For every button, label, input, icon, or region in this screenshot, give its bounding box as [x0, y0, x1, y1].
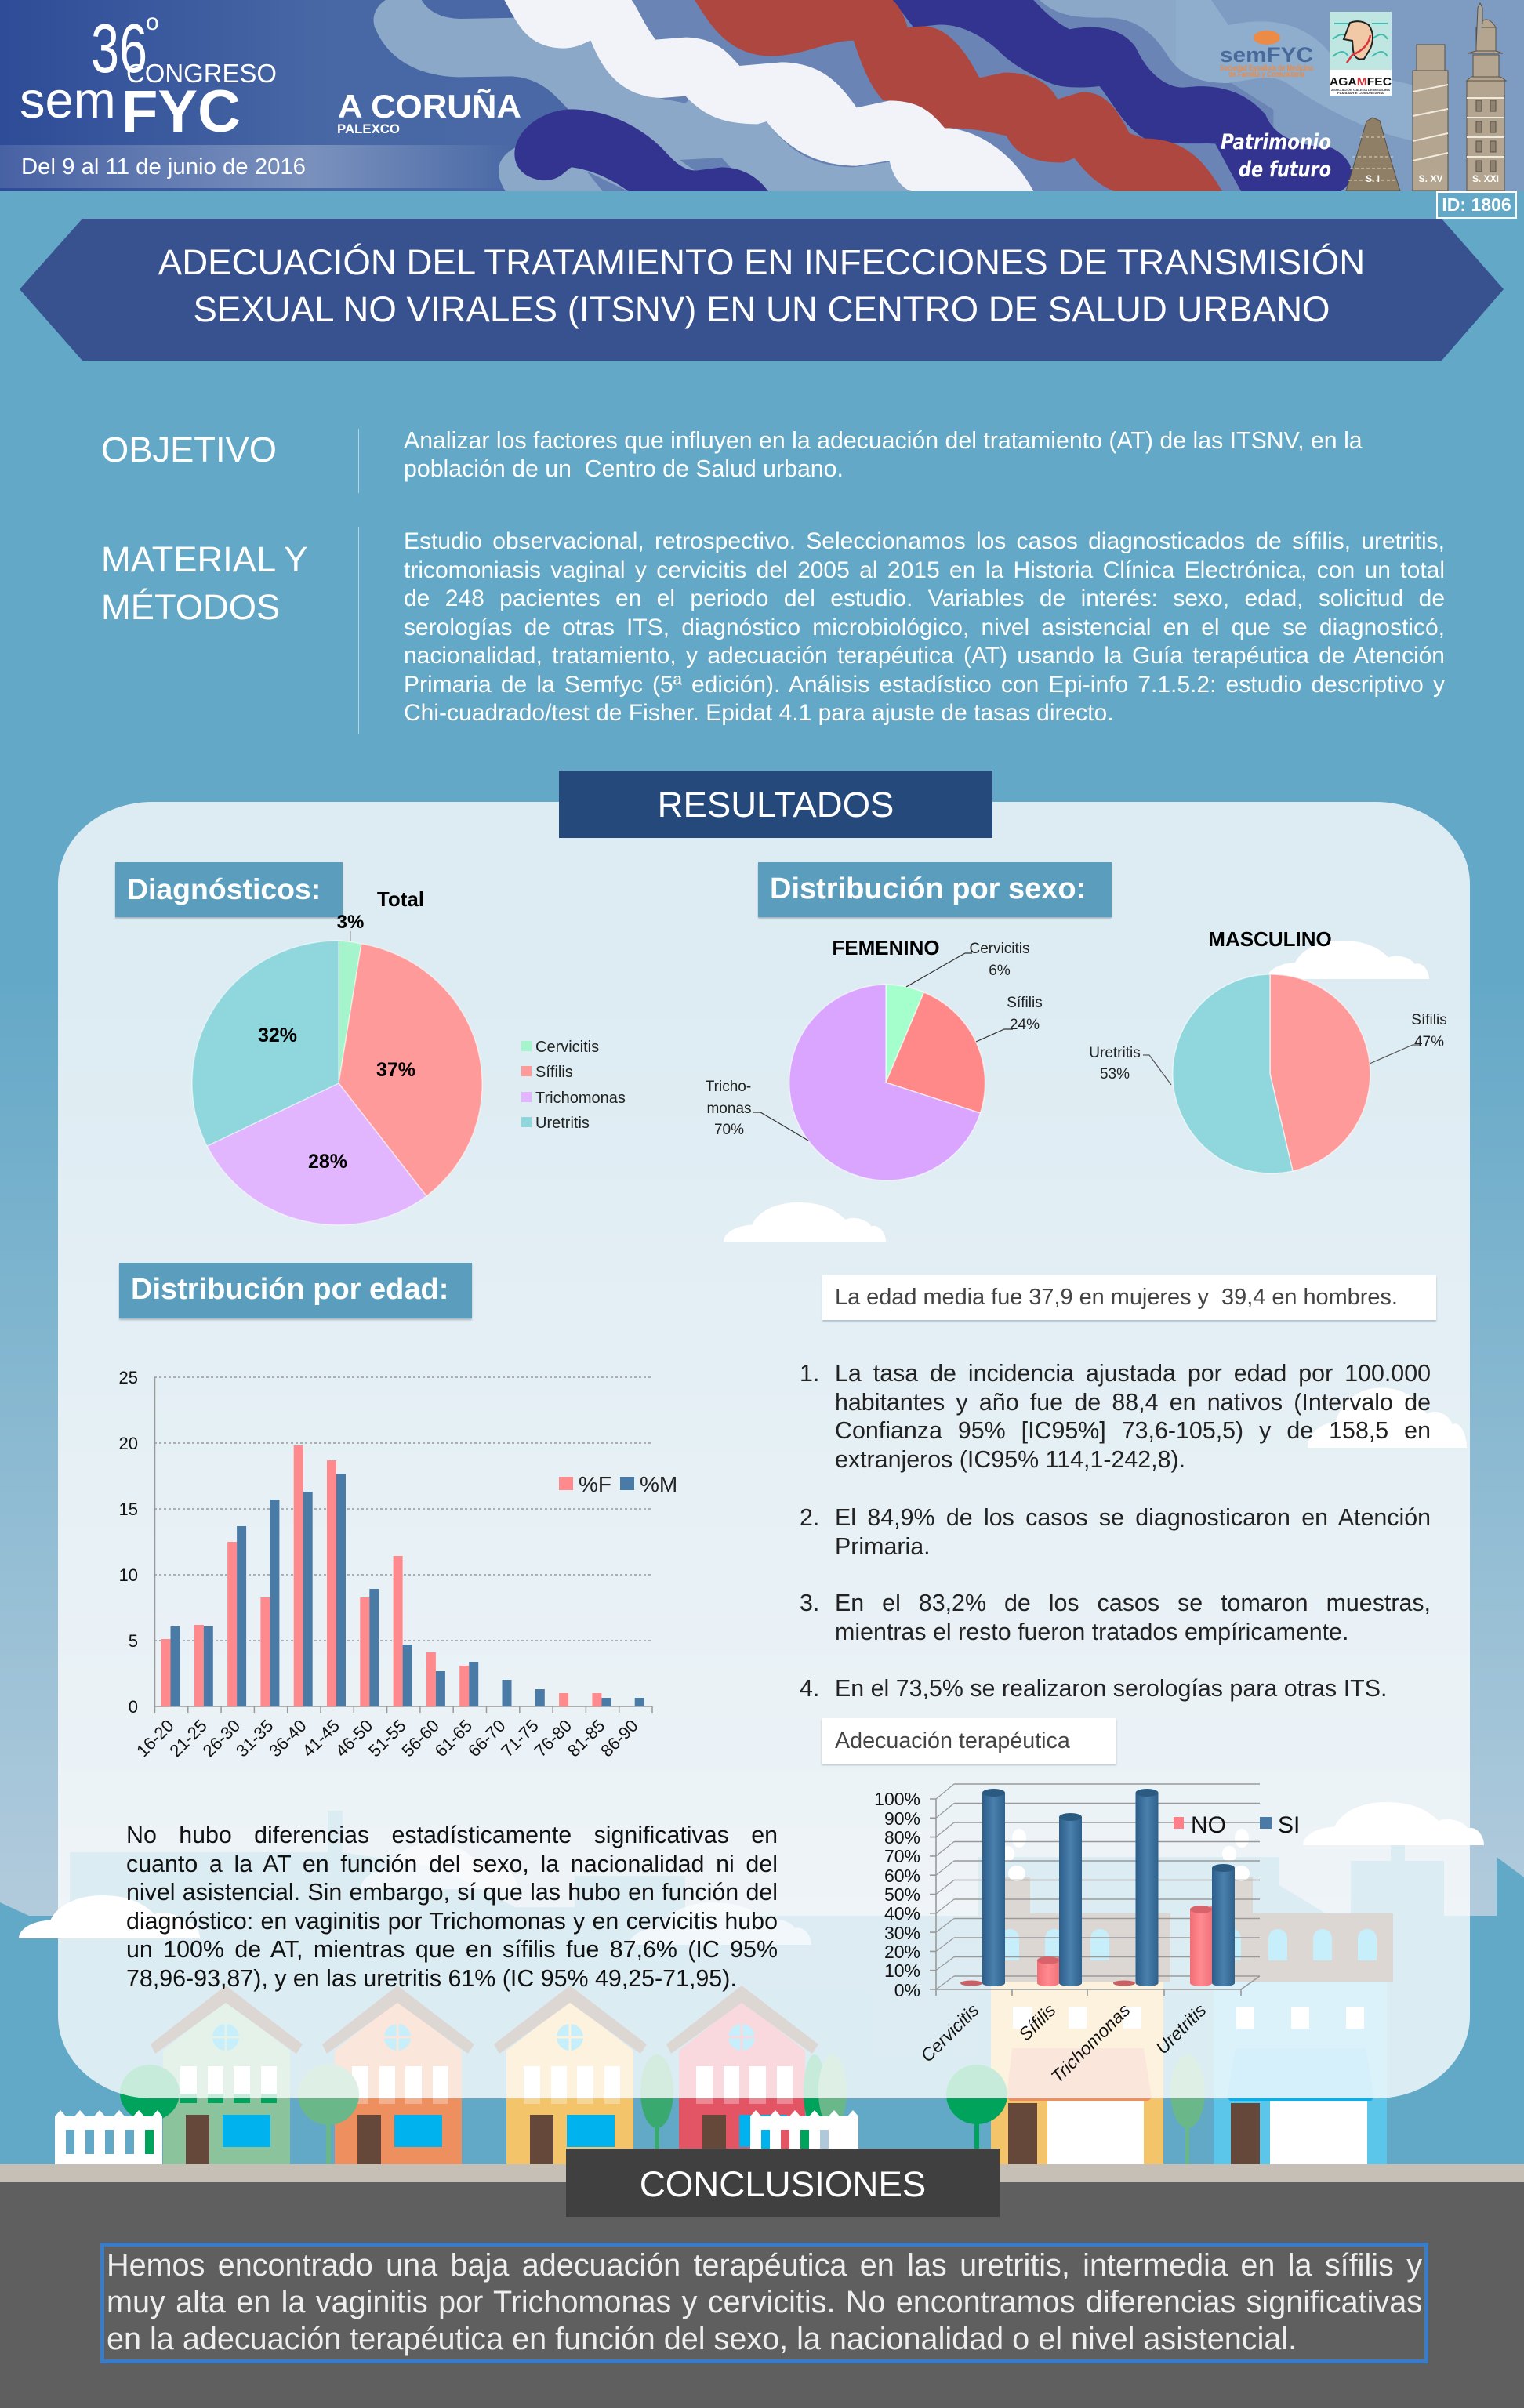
legend [1174, 1812, 1300, 1838]
ID tag: ID: 1806 [1442, 194, 1511, 215]
divider métodos [358, 527, 359, 734]
métodos text: tricomoniasis vaginal y cervicitis del 2005 al 2015 en la Historia Clínica Electrónica, con un total [404, 557, 1445, 583]
shop 2 [1214, 1829, 1393, 2164]
title text: SEXUAL NO VIRALES (ITSNV) EN UN CENTRO DE SALUD URBANO [193, 289, 1330, 329]
y axis labels: 80% [884, 1827, 920, 1848]
text: resultados estadísticos: No hubo diferencias estadísticamente significativas en [126, 1822, 778, 1848]
title ribbon [20, 219, 1504, 361]
callout: edad media [822, 1275, 1436, 1320]
heading: diagnósticos [115, 862, 343, 917]
congress logo [20, 9, 277, 145]
conclusions text box [100, 2243, 1428, 2363]
conclusions background [0, 2182, 1524, 2408]
y axis labels: 40% [884, 1903, 920, 1924]
y axis labels: 25 [119, 1368, 138, 1387]
objetivo text: Analizar los factores que influyen en la adecuación del tratamiento (AT) de las ITSNV, en la [404, 428, 1363, 454]
dates: Del 9 al 11 de junio de 2016 [21, 154, 306, 180]
finding 1 [800, 1360, 1431, 1472]
pie chart: masculino: MASCULINO [1208, 927, 1332, 951]
métodos text [404, 528, 1445, 726]
y axis labels: 5 [129, 1631, 138, 1651]
finding 4: 4. [800, 1675, 819, 1702]
legend [559, 1472, 677, 1496]
tower labels [1366, 173, 1499, 184]
shop 1 [991, 1829, 1170, 2164]
x axis labels: 76-80 [531, 1716, 575, 1761]
finding 1: La tasa de incidencia ajustada por edad por 100.000 [835, 1360, 1431, 1387]
semFYC logo: de Familia y Comunitaria [1228, 71, 1304, 79]
pie chart: femenino: Cervicitis [969, 941, 1030, 957]
slogan: de futuro [1239, 158, 1331, 182]
panel: resultados [58, 802, 1470, 2098]
pie chart: femenino: 70% [714, 1122, 744, 1138]
pie chart: diagnósticos total: 3% [337, 912, 364, 933]
y axis labels: 100% [874, 1789, 920, 1809]
legend: Sífilis [535, 1064, 573, 1081]
legend: Cervicitis [535, 1039, 599, 1056]
heading: distribución por edad [119, 1263, 472, 1318]
métodos text: Estudio observacional, retrospectivo. Seleccionamos los casos diagnosticados de sífilis, uretritis, [404, 528, 1445, 554]
pie chart: masculino: Sífilis [1411, 1012, 1447, 1028]
ID tag [1436, 191, 1517, 219]
AGAMFEC logo: FAMILIAR E COMUNITARIA [1337, 91, 1384, 95]
pie chart: diagnósticos total: Total [377, 887, 424, 911]
cylinders SI [982, 1789, 1235, 1986]
text: resultados estadísticos: un 100% de AT, mientras que en sífilis fue 87,6% (IC 95% [126, 1936, 778, 1963]
semFYC logo: semFYC [1220, 43, 1313, 67]
legend: Uretritis [535, 1115, 590, 1132]
heading: material y métodos: MÉTODOS [101, 587, 280, 627]
heading: diagnósticos: Diagnósticos: [127, 872, 321, 905]
heading: material y métodos: MATERIAL Y [101, 539, 307, 579]
semFYC logo: Sociedad Española de Medicina [1220, 64, 1313, 73]
métodos text: de 248 pacientes en el periodo del estudio. Variables de interés: sexo, edad, solicitud de [404, 586, 1445, 611]
venue: PALEXCO [337, 121, 400, 136]
x axis labels: 61-65 [431, 1716, 476, 1761]
x axis labels: 26-30 [199, 1716, 244, 1761]
divider objetivo [358, 429, 359, 493]
house 1 [151, 1986, 303, 2164]
pie chart: femenino: 6% [989, 963, 1011, 979]
trees on the right [946, 2054, 1205, 2164]
semFYC logo [1220, 31, 1313, 79]
y axis labels: 15 [119, 1500, 138, 1519]
text: resultados estadísticos: nivel asistencial. Sin embargo, sí que las hubo en función del [126, 1879, 778, 1906]
legend: SI [1278, 1812, 1300, 1838]
y axis labels [874, 1789, 920, 2000]
venue: A CORUÑA [338, 88, 521, 125]
house 4 [666, 1986, 818, 2164]
category labels: Uretritis [1152, 2000, 1210, 2058]
congress logo: o [146, 9, 159, 35]
numbered findings [800, 1360, 1431, 1702]
bars %F [161, 1445, 601, 1706]
legend: %M [640, 1472, 677, 1496]
3D bar chart: adecuación terapéutica [874, 1783, 1300, 2087]
pie chart: masculino: 53% [1100, 1066, 1130, 1083]
legend: Trichomonas [535, 1090, 626, 1107]
congress logo: sem [20, 71, 116, 129]
x axis labels: 16-20 [132, 1716, 178, 1761]
trees on the left [120, 2054, 847, 2164]
pie chart: femenino: 24% [1010, 1017, 1040, 1033]
x axis labels: 36-40 [265, 1716, 310, 1761]
pie chart: diagnósticos total: 32% [258, 1024, 297, 1046]
slogan: Patrimonio [1221, 130, 1331, 154]
heading: distribución por edad: Distribución por edad: [131, 1273, 448, 1306]
pie chart: masculino [1089, 927, 1447, 1174]
y axis labels: 30% [884, 1923, 920, 1943]
category labels: Sífilis [1014, 2000, 1060, 2044]
pie chart: femenino: Sífilis [1007, 995, 1043, 1011]
finding 3: En el 83,2% de los casos se tomaron muestras, [835, 1590, 1431, 1616]
objetivo text [404, 428, 1363, 482]
x axis labels: 66-70 [464, 1716, 510, 1761]
tower labels: S. XV [1419, 173, 1442, 184]
x axis labels: 41-45 [299, 1716, 343, 1761]
y axis labels: 20 [119, 1434, 138, 1453]
text: resultados estadísticos: diagnóstico: en vaginitis por Trichomonas y en cervicitis hubo [126, 1908, 778, 1935]
pie chart: masculino: Uretritis [1089, 1045, 1141, 1061]
objetivo text: población de un Centro de Salud urbano. [404, 456, 844, 482]
x axis labels: 81-85 [564, 1716, 608, 1761]
y axis labels: 60% [884, 1866, 920, 1886]
x axis labels: 31-35 [232, 1716, 277, 1761]
title text: ADECUACIÓN DEL TRATAMIENTO EN INFECCIONES DE TRANSMISIÓN [158, 242, 1365, 282]
métodos text: serologías de otras ITS, diagnóstico microbiológico, nivel asistencial en el que se diagnosticó, [404, 615, 1445, 640]
text: resultados estadísticos [126, 1822, 778, 1992]
congress logo: 36 [91, 9, 147, 87]
métodos text: nacionalidad, tratamiento, y adecuación terapéutica (AT) usando la Guía terapéutica de Atención [404, 643, 1445, 669]
white picket fence left [55, 2110, 162, 2164]
callout: edad media: La edad media fue 37,9 en mujeres y 39,4 en hombres. [835, 1285, 1398, 1310]
legend: %F [579, 1472, 611, 1496]
AGAMFEC logo: ASOCIACIÓN GALEGA DE MEDICINA [1331, 88, 1390, 92]
congress logo: CONGRESO [126, 59, 277, 88]
pie chart: femenino: FEMENINO [832, 936, 940, 959]
y axis labels: 50% [884, 1884, 920, 1905]
pie chart: femenino: monas [706, 1101, 752, 1117]
pie chart: femenino [706, 936, 1043, 1181]
callout: adecuación terapéutica: Adecuación terapéutica [835, 1728, 1070, 1753]
tower labels: S. I [1366, 173, 1380, 184]
métodos text: Primaria de la Semfyc (5ª edición). Análisis estadístico con Epi-info 7.1.5.2: estudio descriptivo y [404, 671, 1445, 698]
finding 2: El 84,9% de los casos se diagnosticaron en Atención [835, 1504, 1431, 1531]
pie chart: femenino: Tricho- [706, 1079, 751, 1095]
tower labels: S. XXI [1472, 173, 1499, 184]
y axis labels [119, 1368, 138, 1717]
finding 3: 3. [800, 1590, 819, 1616]
chart walls [930, 1784, 1260, 1996]
AGAMFEC logo: AGAMFEC [1330, 75, 1392, 89]
heading: objetivo: OBJETIVO [101, 430, 277, 470]
category labels: Trichomonas [1047, 2000, 1134, 2087]
banner header [0, 0, 1524, 191]
métodos text: Chi-cuadrado/test de Fisher. Epidat 4.1 para ajuste de tasas directo. [404, 700, 1114, 726]
finding 3 [800, 1590, 1431, 1645]
x axis labels: 71-75 [497, 1716, 542, 1761]
finding 2 [800, 1504, 1431, 1560]
y axis labels: 10% [884, 1960, 920, 1981]
pie chart: diagnósticos total: 37% [376, 1059, 415, 1081]
congress logo: FYC [122, 78, 241, 145]
finding 2: 2. [800, 1504, 819, 1531]
heading: resultados [559, 771, 992, 838]
x axis labels: 21-25 [165, 1716, 211, 1761]
white picket fence right [750, 2110, 858, 2152]
legend [521, 1039, 626, 1132]
y axis labels: 20% [884, 1942, 920, 1962]
AGAMFEC logo [1330, 12, 1392, 96]
city: houses, shops, trees and street [0, 1829, 1524, 2408]
text: resultados estadísticos: 78,96-93,87), y en las uretritis 61% (IC 95% 49,25-71,95). [126, 1965, 737, 1992]
x axis labels: 51-55 [365, 1716, 410, 1761]
y axis labels: 0 [129, 1697, 138, 1717]
finding 1: 1. [800, 1360, 819, 1387]
heading: conclusiones [566, 2149, 1000, 2217]
finding 4: En el 73,5% se realizaron serologías para otras ITS. [835, 1675, 1387, 1702]
heading: material y métodos [101, 539, 307, 627]
y axis labels: 90% [884, 1808, 920, 1829]
slogan [1221, 130, 1331, 182]
category labels: Cervicitis [916, 2000, 983, 2065]
conclusions text box: Hemos encontrado una baja adecuación terapéutica en las uretritis, intermedia en la sífilis y [107, 2248, 1422, 2283]
finding 3: mientras el resto fueron tratados empíricamente. [835, 1618, 1348, 1645]
house 2 [322, 1986, 474, 2164]
heading: resultados: RESULTADOS [658, 785, 894, 825]
y axis labels: 0% [894, 1980, 920, 2000]
category labels [916, 2000, 1210, 2087]
heading: distribución por sexo [758, 862, 1112, 917]
title text [158, 242, 1365, 329]
clouds [19, 941, 1484, 1945]
cylinders NO [960, 1906, 1212, 1986]
finding 1: extranjeros (IC95% 114,1-242,8). [835, 1445, 1185, 1472]
finding 2: Primaria. [835, 1533, 931, 1560]
pie chart: masculino: 47% [1414, 1034, 1444, 1050]
street [0, 2164, 1524, 2182]
text: resultados estadísticos: cuanto a la AT en función del sexo, la nacionalidad ni del [126, 1851, 778, 1877]
house 3 [494, 1986, 647, 2164]
bar chart: edad [119, 1368, 677, 1761]
banner waves [0, 0, 1524, 191]
conclusions text box: en la adecuación terapéutica en función del sexo, la nacionalidad o el nivel asistencial. [107, 2322, 1297, 2356]
finding 1: habitantes y año fue de 88,4 en nativos (Intervalo de [835, 1389, 1431, 1416]
x axis labels: 86-90 [597, 1716, 642, 1761]
x axis labels [132, 1716, 642, 1761]
y axis labels: 70% [884, 1846, 920, 1866]
x axis labels: 46-50 [332, 1716, 376, 1761]
pie chart: diagnósticos total [191, 887, 626, 1226]
x axis labels: 56-60 [397, 1716, 443, 1761]
y axis labels: 10 [119, 1565, 138, 1585]
legend: NO [1191, 1812, 1226, 1838]
heading: distribución por sexo: Distribución por sexo: [770, 872, 1086, 905]
towers [1346, 3, 1506, 191]
bars %M [171, 1474, 644, 1706]
heading: conclusiones: CONCLUSIONES [640, 2164, 926, 2204]
finding 1: Confianza 95% [IC95%] 73,6-105,5) y de 158,5 en [835, 1417, 1431, 1444]
conclusions text box: muy alta en la vaginitis por Trichomonas y cervicitis. No encontramos diferencias significativas [107, 2285, 1422, 2319]
pie chart: diagnósticos total: 28% [308, 1151, 347, 1173]
callout: adecuación terapéutica [822, 1718, 1116, 1764]
